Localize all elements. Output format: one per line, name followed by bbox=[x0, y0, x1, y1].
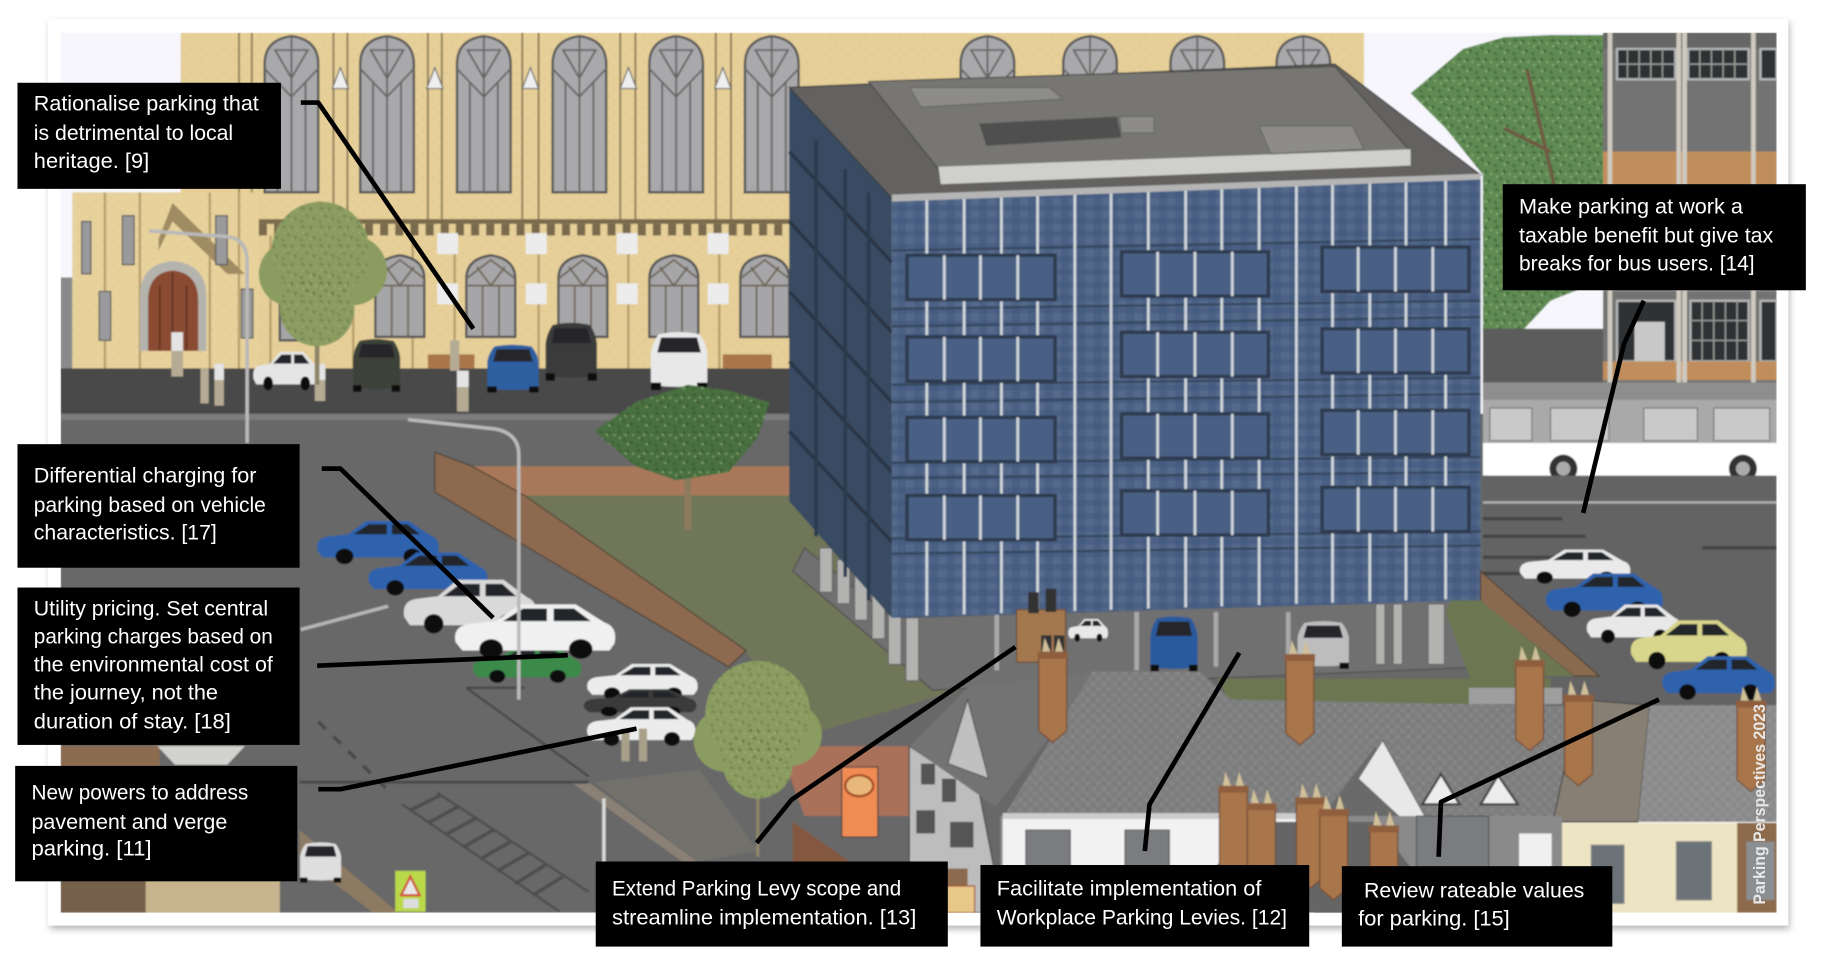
cars on right bbox=[1520, 550, 1775, 700]
road surface bbox=[61, 414, 1489, 913]
label: workplace levies bbox=[980, 865, 1309, 947]
label: workplace levies: Workplace Parking Levies. [12] bbox=[997, 904, 1287, 929]
church facade bbox=[61, 33, 1364, 373]
label: utility pricing: Utility pricing. Set central bbox=[34, 596, 268, 621]
warning sign bbox=[395, 871, 426, 912]
front wall bbox=[892, 175, 1481, 618]
leader line: tax benefit bbox=[1583, 301, 1644, 513]
gable and door bbox=[159, 203, 245, 274]
label: taxable benefit: breaks for bus users. [14] bbox=[1519, 250, 1755, 275]
house roofs bbox=[909, 671, 1777, 822]
traffic island pedestrians bbox=[621, 729, 647, 761]
label: rationalise parking: is detrimental to local bbox=[34, 120, 233, 145]
office building bbox=[789, 64, 1481, 618]
left foreground buildings bbox=[61, 746, 399, 913]
label: differential charging bbox=[17, 444, 300, 568]
pinnacles bbox=[332, 68, 731, 89]
label: rateable values: Review rateable values bbox=[1364, 878, 1584, 903]
label: rationalise parking bbox=[17, 83, 281, 189]
orange pub sign bbox=[790, 745, 910, 862]
cars parked at church bbox=[253, 323, 707, 393]
label: differential charging: characteristics. [17] bbox=[34, 520, 217, 545]
corner shop bbox=[908, 745, 994, 913]
right background tree bbox=[1411, 35, 1603, 338]
leader line: heritage bbox=[301, 103, 473, 329]
leader line: utility pricing bbox=[317, 655, 568, 666]
label: workplace levies: Facilitate implementation of bbox=[997, 875, 1262, 900]
roof bbox=[789, 64, 1481, 198]
bus bbox=[1483, 382, 1777, 483]
second lamp post bbox=[408, 420, 519, 699]
label: rateable values bbox=[1342, 866, 1612, 947]
side wall bbox=[789, 87, 892, 618]
label: differential charging: Differential charging for bbox=[34, 463, 256, 488]
label: new powers: parking. [11] bbox=[31, 836, 152, 861]
label: new powers: New powers to address bbox=[31, 780, 248, 805]
leader line: differential charging bbox=[322, 469, 493, 618]
white stone blocks bbox=[437, 233, 729, 304]
roof plant bbox=[979, 117, 1122, 146]
window bands bbox=[907, 247, 1469, 540]
right background building bbox=[1603, 33, 1777, 385]
leader line: pavement parking bbox=[318, 729, 637, 789]
label: new powers bbox=[15, 766, 297, 881]
label: utility pricing: the journey, not the bbox=[34, 679, 218, 704]
label: taxable benefit: Make parking at work a bbox=[1519, 193, 1743, 218]
label: utility pricing: parking charges based on bbox=[34, 624, 273, 649]
lamp posts and road markings bbox=[149, 231, 758, 913]
label: utility pricing: duration of stay. [18] bbox=[34, 709, 231, 734]
cars under building bbox=[1068, 617, 1349, 672]
leader line: parking levy scope bbox=[757, 647, 1015, 843]
lower windows bbox=[280, 255, 789, 340]
label: extend levy: streamline implementation. [13] bbox=[612, 904, 916, 929]
leader line: rateable values bbox=[1439, 699, 1659, 857]
label: new powers: pavement and verge bbox=[31, 809, 227, 834]
label: utility pricing: the environmental cost of bbox=[34, 651, 274, 676]
right road and bays bbox=[1217, 476, 1777, 709]
leader line: workplace levies bbox=[1145, 653, 1239, 851]
label: extend levy bbox=[596, 861, 948, 947]
house frontage bbox=[1000, 774, 1777, 913]
label: utility pricing bbox=[17, 588, 300, 745]
white mullions bbox=[927, 180, 1446, 616]
crenellated band bbox=[259, 219, 793, 223]
dark tree-shadow wall behind bus bbox=[1483, 329, 1603, 385]
watermark: Parking Perspectives 2023 bbox=[1751, 704, 1769, 905]
upper windows bbox=[265, 36, 1330, 192]
label: extend levy: Extend Parking Levy scope and bbox=[612, 875, 901, 900]
cars on left bbox=[317, 521, 698, 746]
brown wall and grass quad bbox=[435, 452, 968, 732]
label: rationalise parking: heritage. [9] bbox=[34, 148, 149, 173]
label: taxable benefit: taxable benefit but give tax bbox=[1519, 222, 1773, 247]
plinth and parking under building bbox=[793, 548, 1486, 690]
chimneys bbox=[1017, 589, 1766, 916]
raised pavement in front of church bbox=[61, 368, 807, 414]
benches and pedestrians bbox=[171, 332, 772, 412]
label: rationalise parking: Rationalise parking that bbox=[34, 91, 259, 116]
label: rateable values: for parking. [15] bbox=[1358, 906, 1510, 931]
front trees bbox=[259, 202, 822, 857]
label: taxable benefit bbox=[1503, 184, 1806, 290]
label: differential charging: parking based on vehicle bbox=[34, 492, 266, 517]
sky bbox=[62, 33, 1604, 414]
